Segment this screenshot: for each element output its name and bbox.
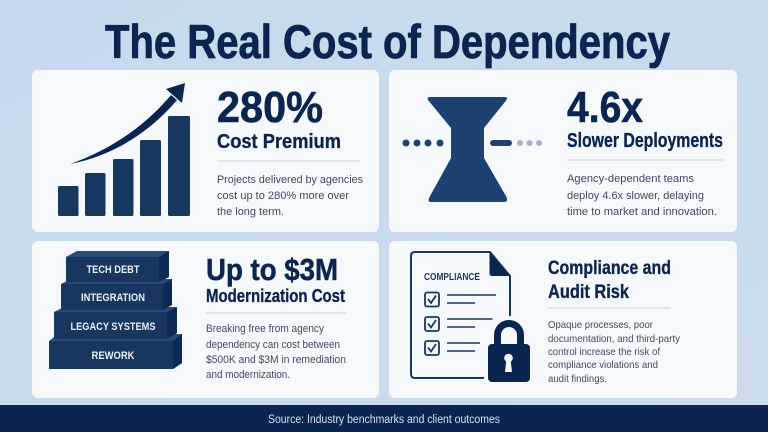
text: cost premium description: the long term.: [217, 206, 284, 218]
text: cost premium description: cost up to 280% more over: [217, 190, 349, 202]
panel: cost premium: [32, 70, 379, 232]
block: rework: REWORK: [92, 350, 135, 362]
heading: compliance and audit risk: Audit Risk: [548, 281, 629, 303]
panel: slower deployments: [389, 70, 737, 232]
panel: compliance and audit risk: [389, 241, 737, 398]
text: compliance description: [548, 319, 681, 385]
text: cost premium description: Projects delivered by agencies: [217, 174, 363, 186]
stat: up to $3M: Up to $3M: [206, 252, 338, 287]
icon: stacked debt blocks: [49, 251, 182, 369]
text: modernization description: and modernization.: [206, 369, 290, 381]
icon: compliance document with padlock: [411, 252, 530, 382]
text: compliance description: Opaque processes, poor: [548, 319, 653, 331]
block: integration: INTEGRATION: [81, 292, 145, 304]
text: slower deployments description: deploy 4.6x slower, delaying: [567, 190, 704, 202]
block: tech debt: TECH DEBT: [86, 264, 140, 276]
text: modernization description: Breaking free from agency: [206, 323, 324, 335]
icon: bottleneck hourglass with dots: [402, 97, 542, 202]
heading: cost premium: Cost Premium: [217, 130, 341, 153]
icon: compliance document with padlock: COMPLIANCE: [424, 272, 480, 283]
text: compliance description: audit findings.: [548, 373, 607, 385]
text: slower deployments description: Agency-dependent teams: [567, 173, 694, 185]
heading: compliance and audit risk: Compliance and: [548, 257, 671, 279]
text: compliance description: compliance violations and: [548, 359, 658, 371]
stat: 4.6x: 4.6x: [567, 83, 643, 132]
heading: compliance and audit risk: [548, 257, 671, 303]
text: modernization description: $500K and $3M in remediation: [206, 354, 346, 366]
text: modernization description: dependency can cost between: [206, 339, 340, 351]
heading: modernization cost: Modernization Cost: [206, 285, 345, 306]
text: slower deployments description: time to market and innovation.: [567, 206, 717, 218]
text: compliance description: documentation, and third-party: [548, 333, 681, 345]
panel: modernization cost: [32, 241, 379, 398]
title: The Real Cost of Dependency: [105, 15, 670, 68]
text: modernization description: [206, 323, 346, 381]
block: legacy systems: LEGACY SYSTEMS: [70, 321, 156, 333]
text: compliance description: control increase the risk of: [548, 346, 660, 358]
heading: slower deployments: Slower Deployments: [567, 130, 723, 152]
stat: 280%: 280%: [217, 83, 323, 132]
text: cost premium description: [217, 174, 363, 218]
text: slower deployments description: [567, 173, 717, 218]
icon: rising bar chart with arrow: [58, 83, 190, 216]
footer bar: [0, 405, 768, 432]
source note: Source: Industry benchmarks and client outcomes: [268, 414, 500, 426]
